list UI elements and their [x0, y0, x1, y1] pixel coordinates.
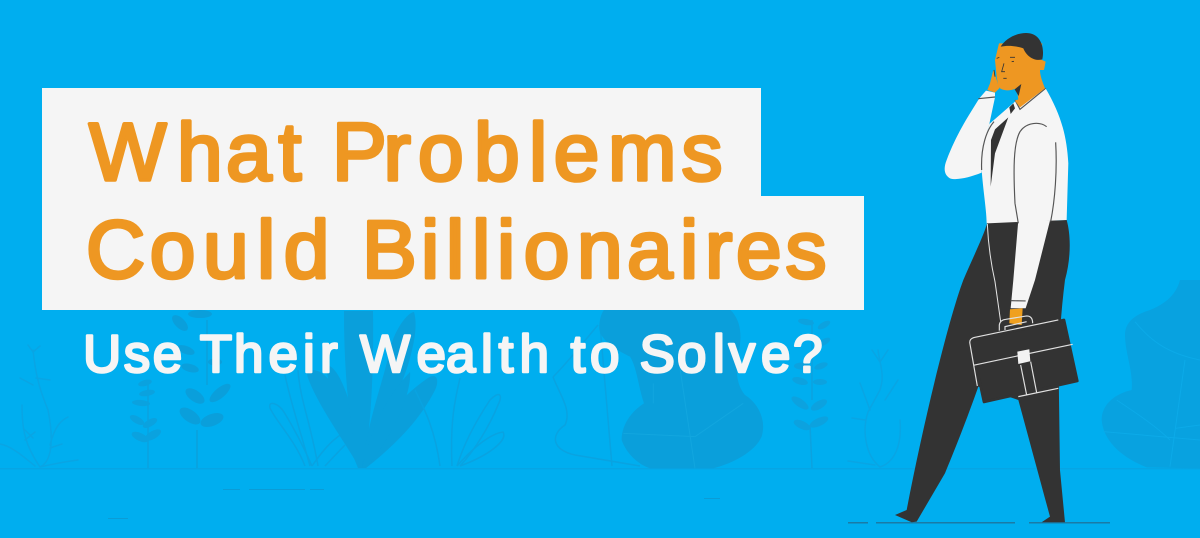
briefcase body — [971, 320, 1077, 402]
leafy tall plant — [169, 310, 233, 468]
ground horizon — [0, 468, 1200, 470]
facial features — [994, 57, 1015, 78]
title panel — [42, 88, 864, 310]
subtitle: Use Their Wealth to Solve? — [83, 325, 822, 384]
briefcase — [970, 316, 1077, 402]
solid fan plant — [307, 311, 437, 468]
briefcase clasp — [1017, 349, 1030, 364]
businessman figure — [895, 33, 1077, 522]
neck and face — [995, 43, 1046, 107]
necktie — [991, 103, 1015, 187]
outlined fan left — [270, 370, 345, 466]
ground dashes — [108, 489, 720, 519]
shirt torso — [981, 88, 1068, 223]
shirt details — [978, 88, 1056, 301]
hand and phone — [987, 70, 999, 93]
briefcase outlines — [970, 316, 1073, 397]
outlined fan right — [415, 378, 504, 466]
solid blob shrub — [599, 307, 763, 468]
small leaf plant right — [790, 318, 832, 468]
background plants — [0, 280, 1200, 519]
ground line under man — [848, 522, 1110, 524]
lowered arm sleeve — [1011, 220, 1050, 308]
trousers — [895, 220, 1070, 522]
title line 2: Could Billionaires — [86, 204, 826, 296]
hand on briefcase — [1009, 308, 1023, 325]
leafy stem plant — [128, 378, 163, 468]
trouser seam — [987, 224, 1001, 322]
raised arm sleeve — [945, 91, 995, 179]
title line 1: What Problems — [89, 107, 722, 198]
outlined ghost blob — [553, 325, 640, 466]
neck shadow — [1015, 84, 1021, 96]
faint branch plant right — [848, 350, 900, 467]
right shrub — [1102, 280, 1200, 468]
hair — [1001, 33, 1043, 60]
faint branch plant left — [0, 345, 78, 467]
